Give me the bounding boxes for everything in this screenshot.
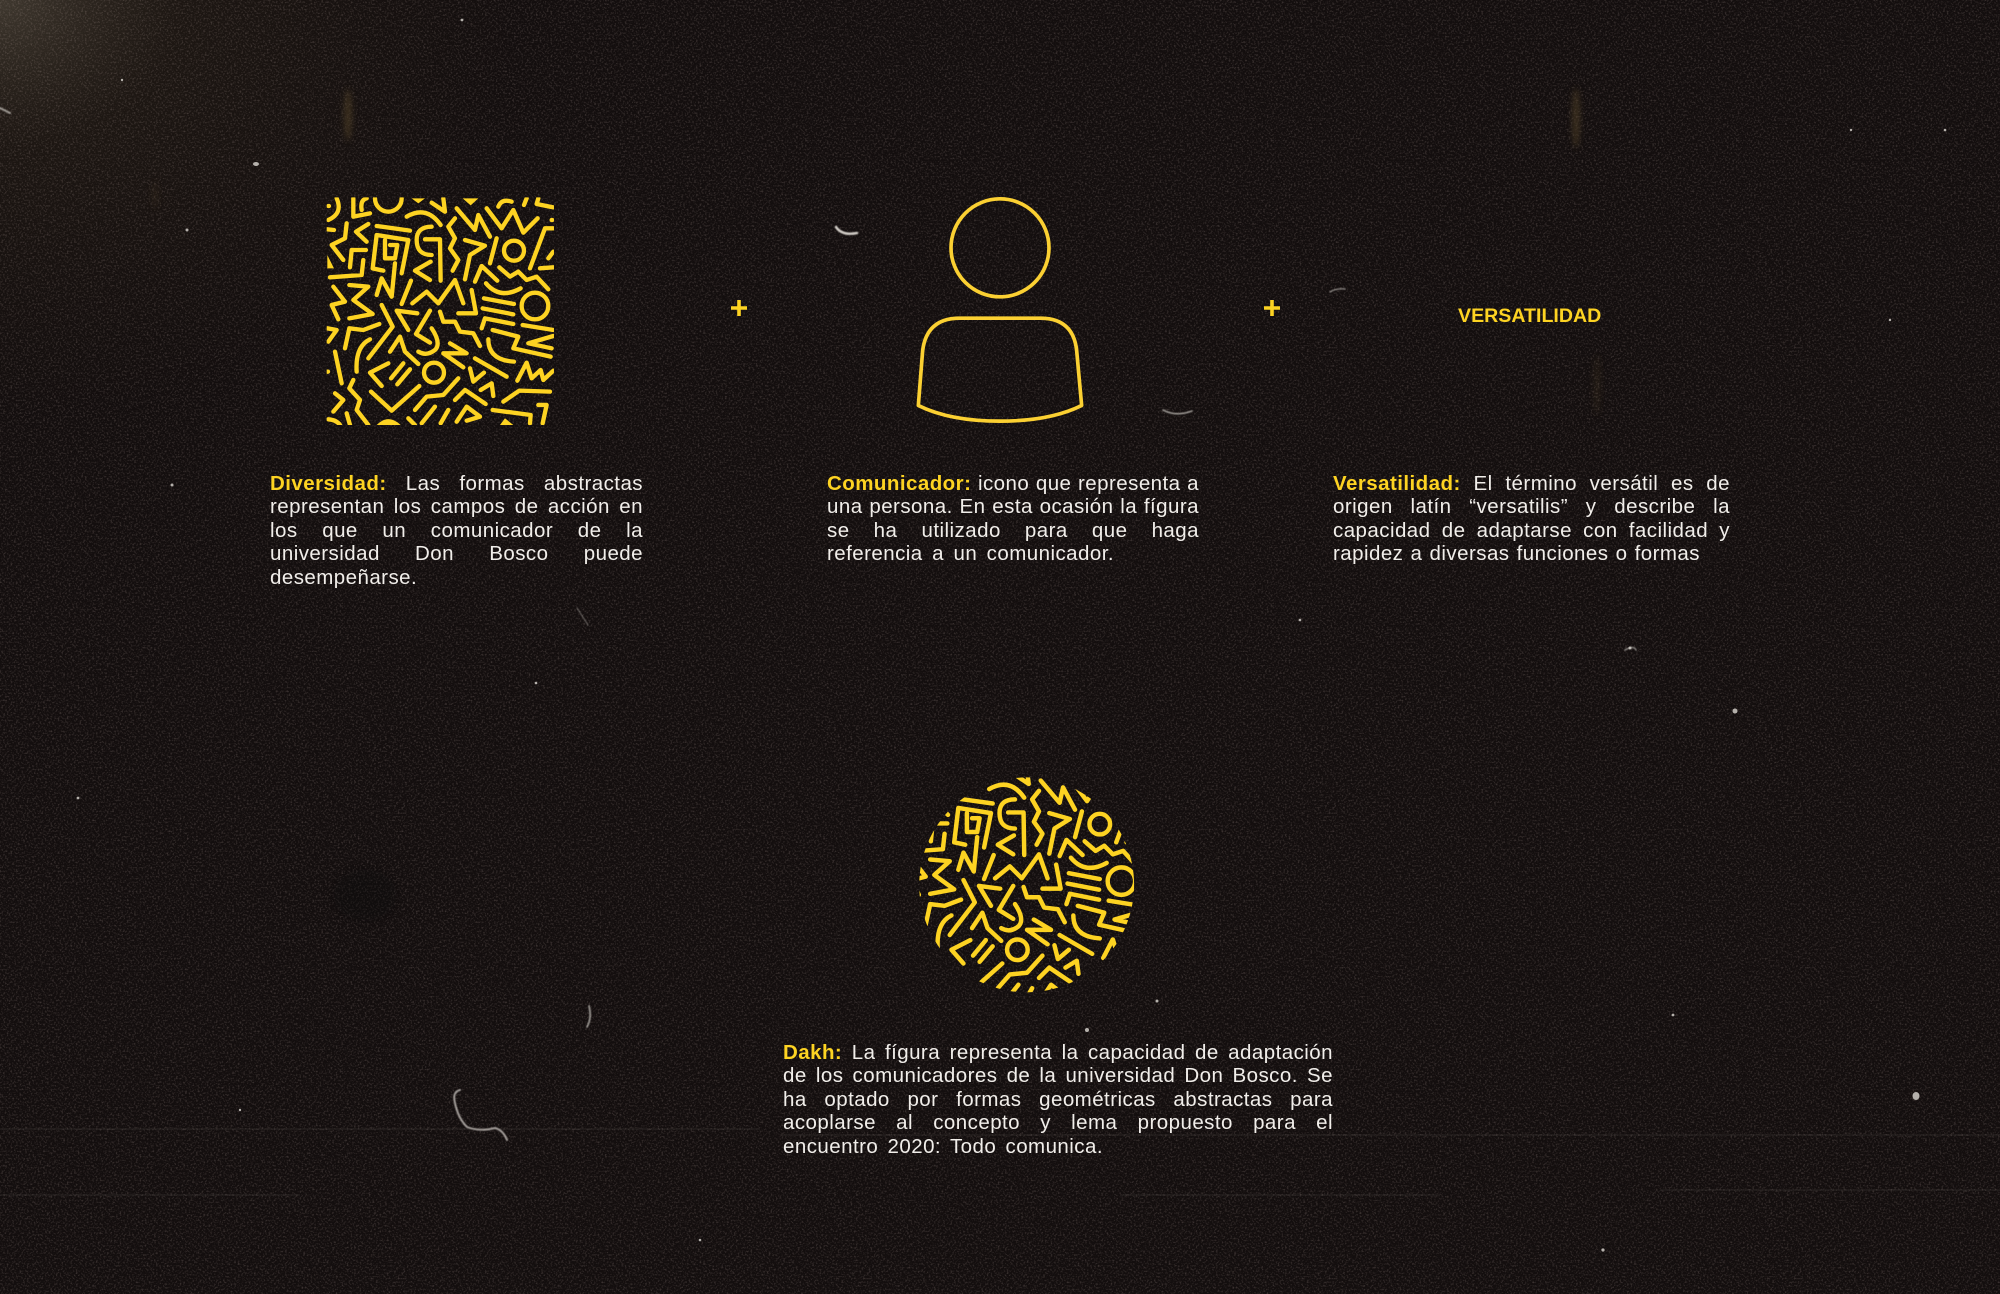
text block: versatilidad: origen latín “versatilis” y describe la	[1333, 495, 1730, 518]
text block: dakh: Dakh: La fígura representa la capacidad de adaptación	[783, 1040, 1333, 1064]
text block: versatilidad	[1333, 472, 1730, 565]
pattern circle: dakh	[919, 777, 1134, 992]
text block: comunicador	[827, 472, 1199, 565]
text block: diversidad: representan los campos de acción en	[270, 495, 643, 518]
text block: dakh: encuentro 2020: Todo comunica.	[783, 1134, 1103, 1158]
text block: versatilidad: rapidez a diversas funciones o formas	[1333, 542, 1700, 565]
text block: diversidad: desempeñarse.	[270, 566, 417, 588]
text block: dakh: ha optado por formas geométricas abstractas para	[783, 1088, 1333, 1110]
text block: dakh: de los comunicadores de la universidad Don Bosco. Se	[783, 1064, 1333, 1087]
text block: diversidad: los que un comunicador de la	[270, 518, 643, 542]
text block: versatilidad: capacidad de adaptarse con facilidad y	[1333, 518, 1730, 542]
pattern square: diversidad	[327, 198, 553, 425]
text block: diversidad: universidad Don Bosco puede	[270, 542, 643, 565]
text block: comunicador: Comunicador: icono que representa a	[827, 472, 1199, 494]
text block: diversidad: Diversidad: Las formas abstractas	[270, 472, 643, 494]
plus sign 1	[731, 300, 747, 316]
text block: dakh: acoplarse al concepto y lema propuesto para el	[783, 1111, 1333, 1134]
versatilidad label: VERSATILIDAD	[1458, 305, 1601, 327]
text block: comunicador: una persona. En esta ocasión la fígura	[827, 495, 1199, 518]
text block: diversidad	[270, 472, 643, 588]
text block: comunicador: se ha utilizado para que haga	[827, 518, 1199, 542]
text block: versatilidad: Versatilidad: El término versátil es de	[1333, 472, 1730, 494]
plus sign 2	[1264, 300, 1280, 316]
text block: comunicador: referencia a un comunicador.	[827, 542, 1114, 565]
text block: dakh	[783, 1040, 1333, 1158]
icon: person	[918, 199, 1082, 421]
